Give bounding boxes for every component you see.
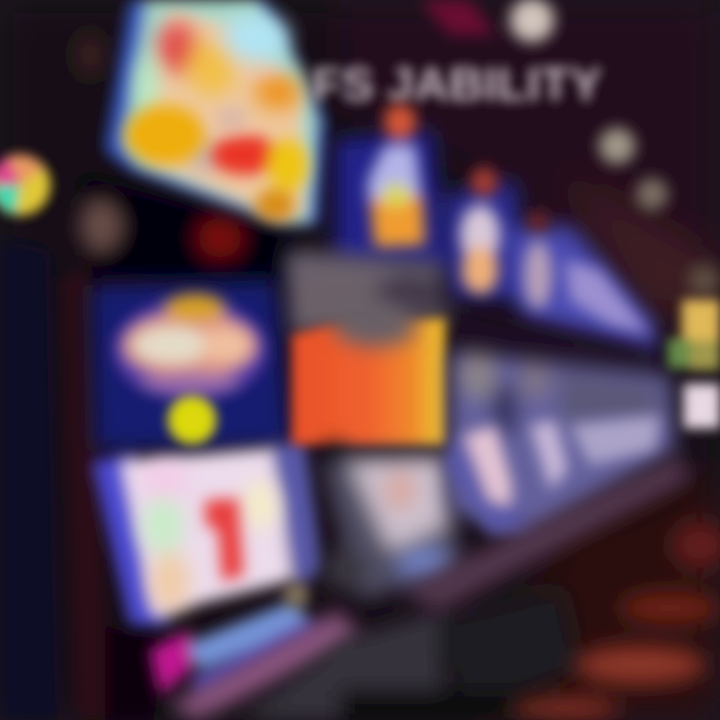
machine 1 logo panel bbox=[92, 280, 290, 450]
yellow button bbox=[168, 396, 216, 444]
orange centre panel bbox=[292, 318, 446, 445]
ceiling lights bbox=[420, 0, 720, 296]
machine row lower screens bbox=[445, 350, 675, 535]
grey mask above orange panel bbox=[333, 303, 417, 347]
machine 2 screen bbox=[320, 443, 460, 600]
blurred heading: FS JABILITY bbox=[312, 58, 602, 110]
dark cabinet top bbox=[76, 33, 300, 285]
left machine cabinet edge bbox=[0, 240, 155, 720]
machine 1 screen bbox=[92, 440, 360, 720]
red seats bbox=[510, 521, 720, 720]
right side machine bbox=[668, 300, 720, 428]
grey upper panel bbox=[285, 250, 650, 375]
row of bottle-shaped toppers bbox=[335, 104, 655, 355]
colour wheel bbox=[0, 155, 50, 215]
floor edge strip bbox=[240, 455, 690, 720]
top illuminated sign bbox=[105, 0, 325, 225]
